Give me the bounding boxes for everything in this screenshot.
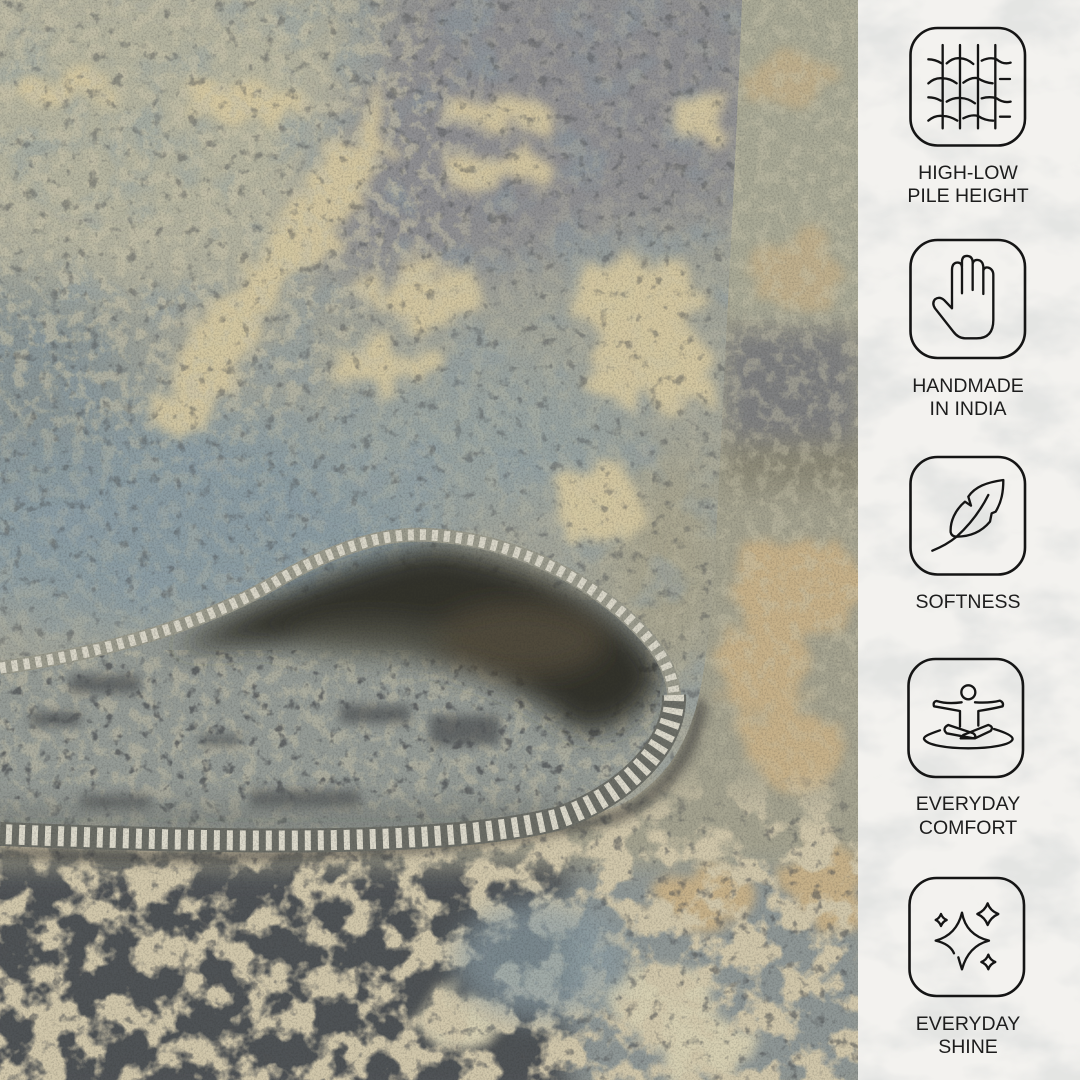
icon: feather — [910, 457, 1025, 574]
label — [916, 793, 1020, 839]
panel: marble feature column — [858, 0, 1080, 1080]
feature: softness — [910, 457, 1025, 613]
rug underside — [0, 548, 700, 850]
label: IN INDIA — [930, 398, 1006, 420]
label: HIGH-LOW — [918, 162, 1018, 184]
icon: pile height — [910, 28, 1025, 146]
roll shadow — [0, 700, 702, 857]
icon: hand — [910, 240, 1025, 358]
fine pile texture — [0, 0, 858, 1080]
rug top face — [0, 0, 770, 860]
label: EVERYDAY — [916, 1013, 1020, 1035]
label: PILE HEIGHT — [907, 185, 1029, 207]
feature: high-low pile height — [907, 28, 1029, 207]
feature: everyday shine — [910, 878, 1024, 1058]
icon: meditating figure — [908, 659, 1023, 777]
label — [907, 162, 1029, 207]
label — [912, 375, 1024, 420]
label: SHINE — [938, 1036, 998, 1058]
label: SOFTNESS — [915, 591, 1021, 613]
label: COMFORT — [919, 817, 1017, 839]
icon: sparkles — [910, 878, 1024, 996]
feature: everyday comfort — [908, 659, 1023, 839]
label: HANDMADE — [912, 375, 1024, 397]
label — [916, 1013, 1020, 1058]
feature: handmade in india — [910, 240, 1025, 420]
whipped rug edge — [0, 535, 674, 841]
label: EVERYDAY — [916, 793, 1020, 815]
